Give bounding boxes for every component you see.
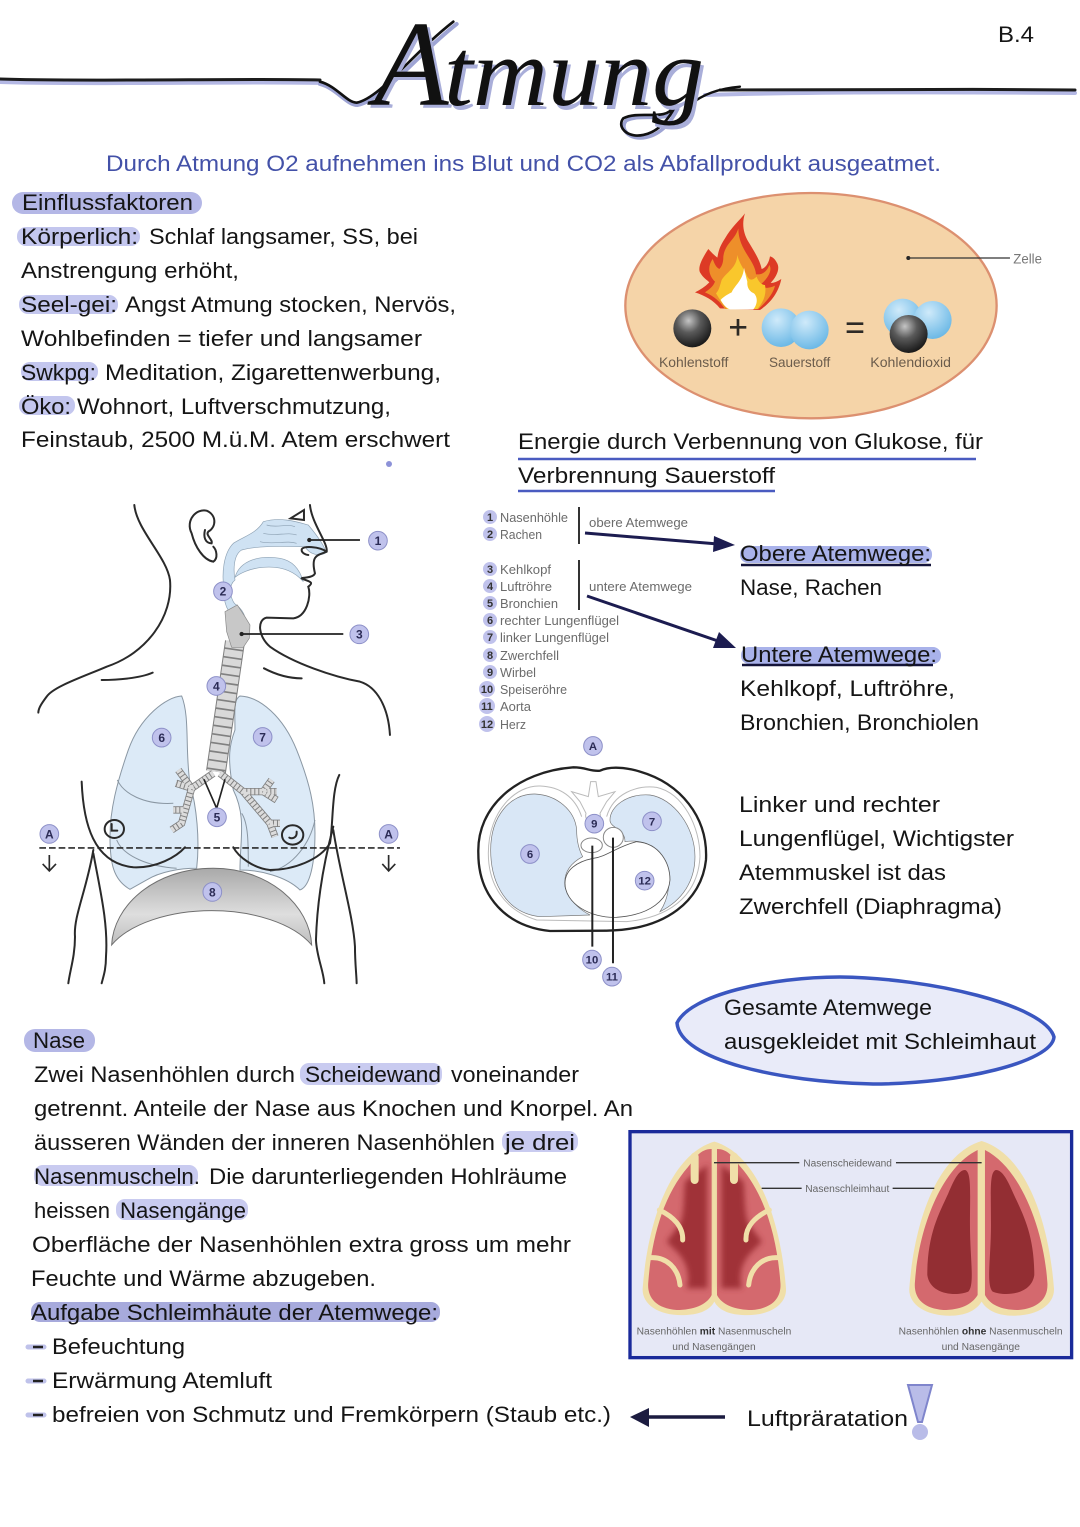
frame [630, 1132, 1072, 1358]
badge numbers: A [45, 827, 54, 841]
lungs [110, 696, 315, 890]
larynx [225, 605, 250, 647]
heading: Einflussfaktoren: Einflussfaktoren [22, 190, 193, 215]
legend numbers: 3 [487, 564, 493, 576]
caption: with conchae: und Nasengängen [672, 1342, 756, 1353]
bracket labels [589, 515, 692, 594]
text block: Energie [518, 429, 983, 491]
brackets [578, 507, 580, 610]
label: Nasenschleimhaut: Nasenschleimhaut [805, 1184, 890, 1195]
text block: factors: Swkpg: [21, 360, 96, 385]
badge numbers [527, 741, 655, 984]
right lung section [491, 794, 590, 917]
legend numbers: 7 [487, 632, 493, 644]
legend numbers: 8 [487, 650, 493, 662]
legend numbers: 10 [481, 684, 493, 696]
text block: factors: Anstrengung erhöht, [21, 258, 239, 283]
intro sentence: Durch Atmung O2 aufnehmen ins Blut und CO2 als Abfallprodukt ausgeatmet. [106, 151, 941, 176]
text block: Lungenflügel: Linker und rechter [739, 792, 940, 817]
text: Luftpräratation: Luftpräratation [747, 1406, 908, 1431]
badge numbers: 6 [158, 731, 165, 745]
legend labels [500, 510, 619, 732]
legend labels: Luftröhre [500, 579, 552, 594]
legend labels: Wirbel [500, 665, 536, 680]
legend labels: Kehlkopf [500, 562, 551, 577]
caption: with conchae [637, 1326, 791, 1353]
badge numbers: 3 [356, 628, 363, 642]
label: Zelle [906, 251, 1042, 267]
flourish lines [0, 22, 1075, 138]
title: Atmung with flourish line: tmung [447, 23, 707, 130]
legend numbers: 4 [487, 581, 494, 593]
legend labels: Zwerchfell [500, 648, 559, 663]
badge numbers: 12 [638, 876, 651, 888]
text block: factors: Körperlich: [21, 224, 138, 249]
thorax outline [478, 767, 706, 931]
legend numbers: 11 [481, 701, 493, 713]
badge numbers: 11 [606, 972, 618, 984]
panel: Einflussfaktoren [12, 190, 456, 452]
bracket labels: obere Atemwege [589, 515, 688, 530]
arrow: to Luftpräratation [630, 1408, 725, 1427]
leader lines [204, 539, 360, 808]
text block: Obere Atemwege: Obere Atemwege: [740, 541, 931, 566]
legend numbers: 6 [487, 615, 493, 627]
badge numbers: 2 [220, 585, 227, 599]
text block: nose description: Feuchte und Wärme abzugeben. [31, 1266, 376, 1291]
badge numbers: 7 [649, 816, 655, 828]
badge numbers: A [384, 827, 393, 841]
text block: factors: Wohnort, Luftverschmutzung, [77, 394, 391, 419]
arrow: to untere Atemwege [587, 596, 736, 648]
text block: Lungenflügel [739, 792, 1014, 919]
carbon atom [673, 309, 711, 347]
trachea [216, 642, 235, 772]
legend labels: Bronchien [500, 596, 558, 611]
legend labels: Aorta [500, 699, 532, 714]
equals sign [847, 324, 863, 332]
bronchi [172, 770, 280, 837]
page number: B.4 [998, 22, 1034, 47]
callout: Schleimhaut: ausgekleidet mit Schleimhaut [724, 1029, 1036, 1054]
right half [717, 1149, 781, 1310]
legend labels: Speiseröhre [500, 682, 567, 697]
text block: Untere Atemwege: Bronchien, Bronchiolen [740, 710, 979, 735]
text block: nose description: je drei [504, 1130, 575, 1155]
text block: nose description: Nasengänge [120, 1198, 246, 1223]
text block: factors: Wohlbefinden = tiefer und langsamer [21, 326, 422, 351]
left lung section [610, 795, 695, 912]
highlights [17, 227, 140, 415]
badge numbers: 1 [375, 534, 382, 548]
dot [386, 461, 392, 467]
text block: nose description: Aufgabe Schleimhäute der Atemwege: [31, 1300, 438, 1325]
text block: Lungenflügel: Zwerchfell (Diaphragma) [739, 894, 1002, 919]
heading: Nase: Nase [33, 1028, 85, 1053]
highlights [34, 1063, 578, 1220]
text block: Obere Atemwege: Nase, Rachen [740, 575, 882, 600]
text block: nose description: getrennt. Anteile der Nase aus Knochen und Knorpel. An [34, 1096, 633, 1121]
legend numbers: 9 [487, 667, 493, 679]
text block: Energie: Verbrennung Sauerstoff [518, 463, 776, 488]
callout: Schleimhaut [677, 977, 1054, 1084]
chart: torso respiratory anatomy [38, 505, 400, 983]
heart [565, 842, 670, 917]
labels [659, 354, 951, 370]
caption: without conchae [899, 1326, 1063, 1353]
text block: factors: Schlaf langsamer, SS, bei [149, 224, 418, 249]
text block: factors: Angst Atmung stocken, Nervös, [125, 292, 456, 317]
list: tasks [33, 1334, 611, 1427]
panel: cell combustion diagram [625, 193, 1042, 418]
labels: Kohlenstoff [659, 354, 728, 370]
number badges [40, 531, 398, 901]
text block: nose description: heissen [34, 1198, 110, 1223]
body outlines [38, 505, 390, 983]
text block: factors: Seel-gei: [21, 292, 117, 317]
section line A [39, 845, 400, 850]
text block: Lungenflügel: Atemmuskel ist das [739, 860, 946, 885]
left nose: with conchae [643, 1142, 786, 1315]
text block: nose description [31, 1062, 633, 1325]
title: Atmung with flourish line: A [367, 0, 449, 132]
oxygen molecule [762, 308, 829, 349]
text block: nose description: Scheidewand [305, 1062, 441, 1087]
carbon dioxide molecule [884, 299, 952, 353]
legend numbers: 2 [487, 529, 493, 541]
arrow: to obere Atemwege [585, 533, 735, 552]
text block: nose description: äusseren Wänden der inneren Nasenhöhlen [34, 1130, 495, 1155]
legend labels: linker Lungenflügel [500, 630, 609, 645]
callout: Schleimhaut: Gesamte Atemwege [724, 995, 932, 1020]
turbinate lines [260, 525, 297, 543]
text block: nose description: Zwei Nasenhöhlen durch [34, 1062, 295, 1087]
legend: numbered anatomy list [479, 507, 692, 732]
badge numbers: 8 [209, 885, 216, 899]
legend numbers [481, 512, 494, 731]
bullet dashes [28, 1347, 44, 1415]
label: Zelle: Zelle [1013, 251, 1042, 267]
text block: factors: Meditation, Zigarettenwerbung, [105, 360, 441, 385]
text block: factors [21, 224, 456, 452]
airway: nasal cavity and pharynx [223, 520, 326, 622]
text block: nose description: Die darunterliegenden Hohlräume [209, 1164, 567, 1189]
list: tasks: befreien von Schmutz und Fremkörpern (Staub etc.) [52, 1402, 611, 1427]
legend labels: rechter Lungenflügel [500, 613, 619, 628]
title: Atmung with flourish line: tmung [444, 19, 704, 126]
badge numbers: 7 [259, 730, 266, 744]
legend badges [479, 510, 497, 732]
badge numbers: 5 [214, 811, 221, 825]
badge numbers: 10 [586, 955, 598, 967]
text block: Untere Atemwege [740, 642, 979, 735]
plus sign [730, 319, 746, 336]
text block: factors: Öko: [21, 394, 71, 419]
list: tasks: Befeuchtung [52, 1334, 185, 1359]
caption: with conchae: Nasenhöhlen mit Nasenmuscheln [637, 1326, 791, 1337]
legend labels: Nasenhöhle [500, 510, 568, 525]
caption: without conchae: und Nasengänge [942, 1342, 1020, 1353]
highlight: Aufgabe [31, 1302, 440, 1322]
legend numbers: 12 [481, 719, 493, 731]
labels: Kohlendioxid [870, 354, 951, 370]
list: tasks: Erwärmung Atemluft [52, 1368, 272, 1393]
title: Atmung with flourish line [0, 0, 1075, 138]
text block: factors: Feinstaub, 2500 M.ü.M. Atem erschwert [21, 427, 450, 452]
text block: Untere Atemwege: Kehlkopf, Luftröhre, [740, 676, 955, 701]
bracket labels: untere Atemwege [589, 579, 692, 594]
labels: Sauerstoff [769, 354, 830, 370]
legend numbers: 1 [487, 512, 493, 524]
badge numbers [45, 534, 393, 899]
title letters: A [370, 0, 452, 135]
badge numbers: 6 [527, 849, 533, 861]
text block: Lungenflügel: Lungenflügel, Wichtigster [739, 826, 1014, 851]
text block: nose description: Oberfläche der Nasenhöhlen extra gross um mehr [32, 1232, 571, 1257]
left half [648, 1149, 712, 1310]
spine [572, 782, 615, 823]
legend numbers: 5 [487, 598, 493, 610]
chart: thorax cross-section [478, 737, 706, 986]
right nose: without conchae [909, 1141, 1054, 1316]
icon: flame [695, 213, 781, 310]
text block: nose description: voneinander [451, 1062, 579, 1087]
palate [235, 557, 303, 582]
caption: without conchae: Nasenhöhlen ohne Nasenmuscheln [899, 1326, 1063, 1337]
diaphragm [112, 868, 312, 945]
badge numbers: 4 [213, 679, 220, 693]
panel: Nase [24, 1028, 633, 1427]
text block: nose description: Nasenmuscheln. [34, 1164, 200, 1189]
leader lines [592, 838, 613, 963]
cell [625, 193, 997, 418]
ribcage strokes [488, 786, 700, 922]
legend labels: Rachen [500, 527, 542, 542]
vessels [581, 827, 623, 853]
badge numbers: 9 [591, 819, 597, 831]
badges [521, 737, 661, 986]
text block: Untere Atemwege: Untere Atemwege: [741, 642, 937, 667]
legend labels: Herz [500, 717, 526, 732]
section arrows [43, 855, 395, 871]
text block: Energie: Energie durch Verbennung von Glukose, für [518, 429, 983, 454]
panel: nasal cavity diagram [630, 1132, 1072, 1358]
text block: Obere Atemwege [740, 541, 932, 600]
icon: exclamation mark [908, 1385, 932, 1440]
label: Nasenscheidewand: Nasenscheidewand [803, 1158, 892, 1169]
badge numbers: A [589, 741, 597, 753]
